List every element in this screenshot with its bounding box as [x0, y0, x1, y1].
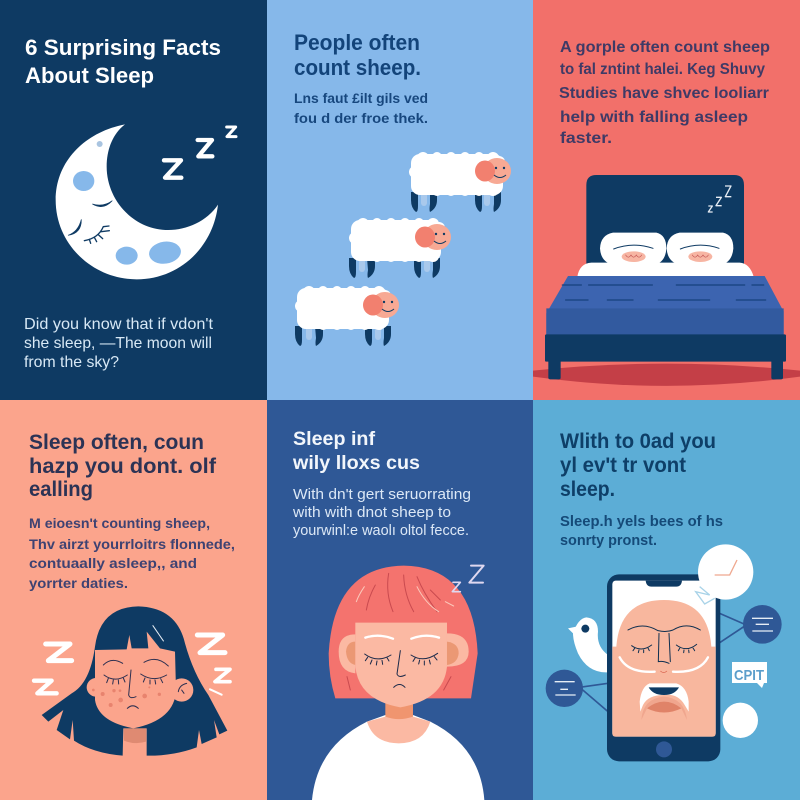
zzz: [452, 566, 484, 592]
heading: 6 surprising facts: About Sleep: [25, 63, 154, 88]
connector lines: [580, 613, 746, 712]
heading: sleep often: [29, 431, 217, 501]
text: focus fact: With dn't gert seruorrating: [293, 486, 471, 503]
badge: left: [546, 670, 583, 707]
heading: sleep often: hazp you dont. olf: [29, 455, 217, 478]
text: bed fact: help with falling asleep: [560, 109, 748, 126]
panel: bed: [533, 0, 800, 400]
text: sheep fact: [294, 90, 428, 126]
text: moon fact: from the sky?: [24, 354, 119, 371]
heading: sleep inf: Sleep inf: [293, 429, 376, 450]
phone: [607, 574, 720, 761]
icon: sleeping moon: [56, 124, 236, 279]
label: chat bubble: [732, 662, 767, 688]
heading: with to bad you: yl ev't tr vont: [560, 454, 686, 477]
heading: with to bad you: [560, 430, 716, 501]
heading: sleep often: ealling: [29, 478, 93, 501]
text: moon fact: Did you know that if vdon't: [24, 316, 214, 333]
text: counting fact: yorrter daties.: [29, 575, 128, 591]
text: phone fact: Sleep.h yels bees of hs: [560, 513, 723, 530]
face details: [103, 659, 187, 708]
text: sheep fact: fou d der froe thek.: [294, 110, 428, 126]
icon: sheep bottom: [295, 286, 399, 346]
heading: sleep often: Sleep often, coun: [29, 431, 204, 454]
text: counting fact: Thv airzt yourrloitrs flonnede,: [29, 536, 235, 552]
zzz: [34, 635, 230, 695]
icon: sleeping woman: [34, 606, 230, 756]
heading: sleep inf: wily lloxs cus: [292, 453, 420, 474]
text: phone fact: sonrty pronst.: [560, 532, 657, 549]
heading: people often count sheep: count sheep.: [294, 55, 421, 80]
label: chat bubble: CPIT: [734, 667, 764, 684]
face details: [620, 657, 708, 672]
white circle: [723, 703, 758, 738]
heading: 6 surprising facts: [25, 35, 221, 88]
heading: people often count sheep: People often: [294, 30, 420, 55]
text: bed fact: to fal zntint halei. Keg Shuvy: [560, 61, 765, 78]
heading: with to bad you: sleep.: [560, 478, 615, 501]
panel: woman with long hair: [0, 400, 267, 800]
text: bed fact: Studies have shvec looliarr: [559, 85, 769, 102]
icon: sheep top: [409, 152, 511, 212]
text: moon fact: [24, 316, 214, 371]
text: bed fact: faster.: [560, 130, 612, 147]
heading: 6 surprising facts: 6 Surprising Facts: [25, 35, 221, 60]
icon: sleeping woman with bob: [312, 566, 484, 800]
text: moon fact: she sleep, —The moon will: [24, 335, 212, 352]
icon: phone illustration: [546, 544, 782, 761]
text: bed fact: [559, 39, 770, 147]
face details: [365, 636, 439, 639]
text: focus fact: with with dnot sheep to: [292, 504, 451, 521]
text: counting fact: [29, 515, 235, 591]
bird: [568, 617, 608, 672]
panel: moon: [0, 0, 267, 400]
text: focus fact: [292, 486, 471, 539]
text: focus fact: yourwinl:e waolı oltol fecce.: [293, 522, 469, 539]
zzz: [164, 127, 236, 178]
text: sheep fact: Lns faut £ilt gils ved: [294, 90, 428, 106]
hair lines: [347, 573, 451, 690]
text: counting fact: contuaally asleep,, and: [29, 555, 197, 571]
icon: bed: [533, 175, 800, 386]
heading: with to bad you: Wlith to 0ad you: [560, 430, 716, 453]
icon: sheep middle: [349, 218, 451, 278]
panel: phone: [533, 400, 800, 800]
zzz: [708, 186, 731, 212]
badge: right: [743, 605, 782, 644]
heading: sleep inf: [292, 429, 420, 474]
text: counting fact: M eioesn't counting sheep,: [29, 515, 210, 531]
panel: woman with red bob: [267, 400, 533, 800]
text: phone fact: [560, 513, 723, 549]
text: bed fact: A gorple often count sheep: [560, 39, 770, 56]
heading: people often count sheep: [294, 30, 421, 80]
pillows: [600, 233, 733, 265]
speech bubble: chart: [696, 544, 753, 604]
panel: counting sheep: [267, 0, 533, 400]
